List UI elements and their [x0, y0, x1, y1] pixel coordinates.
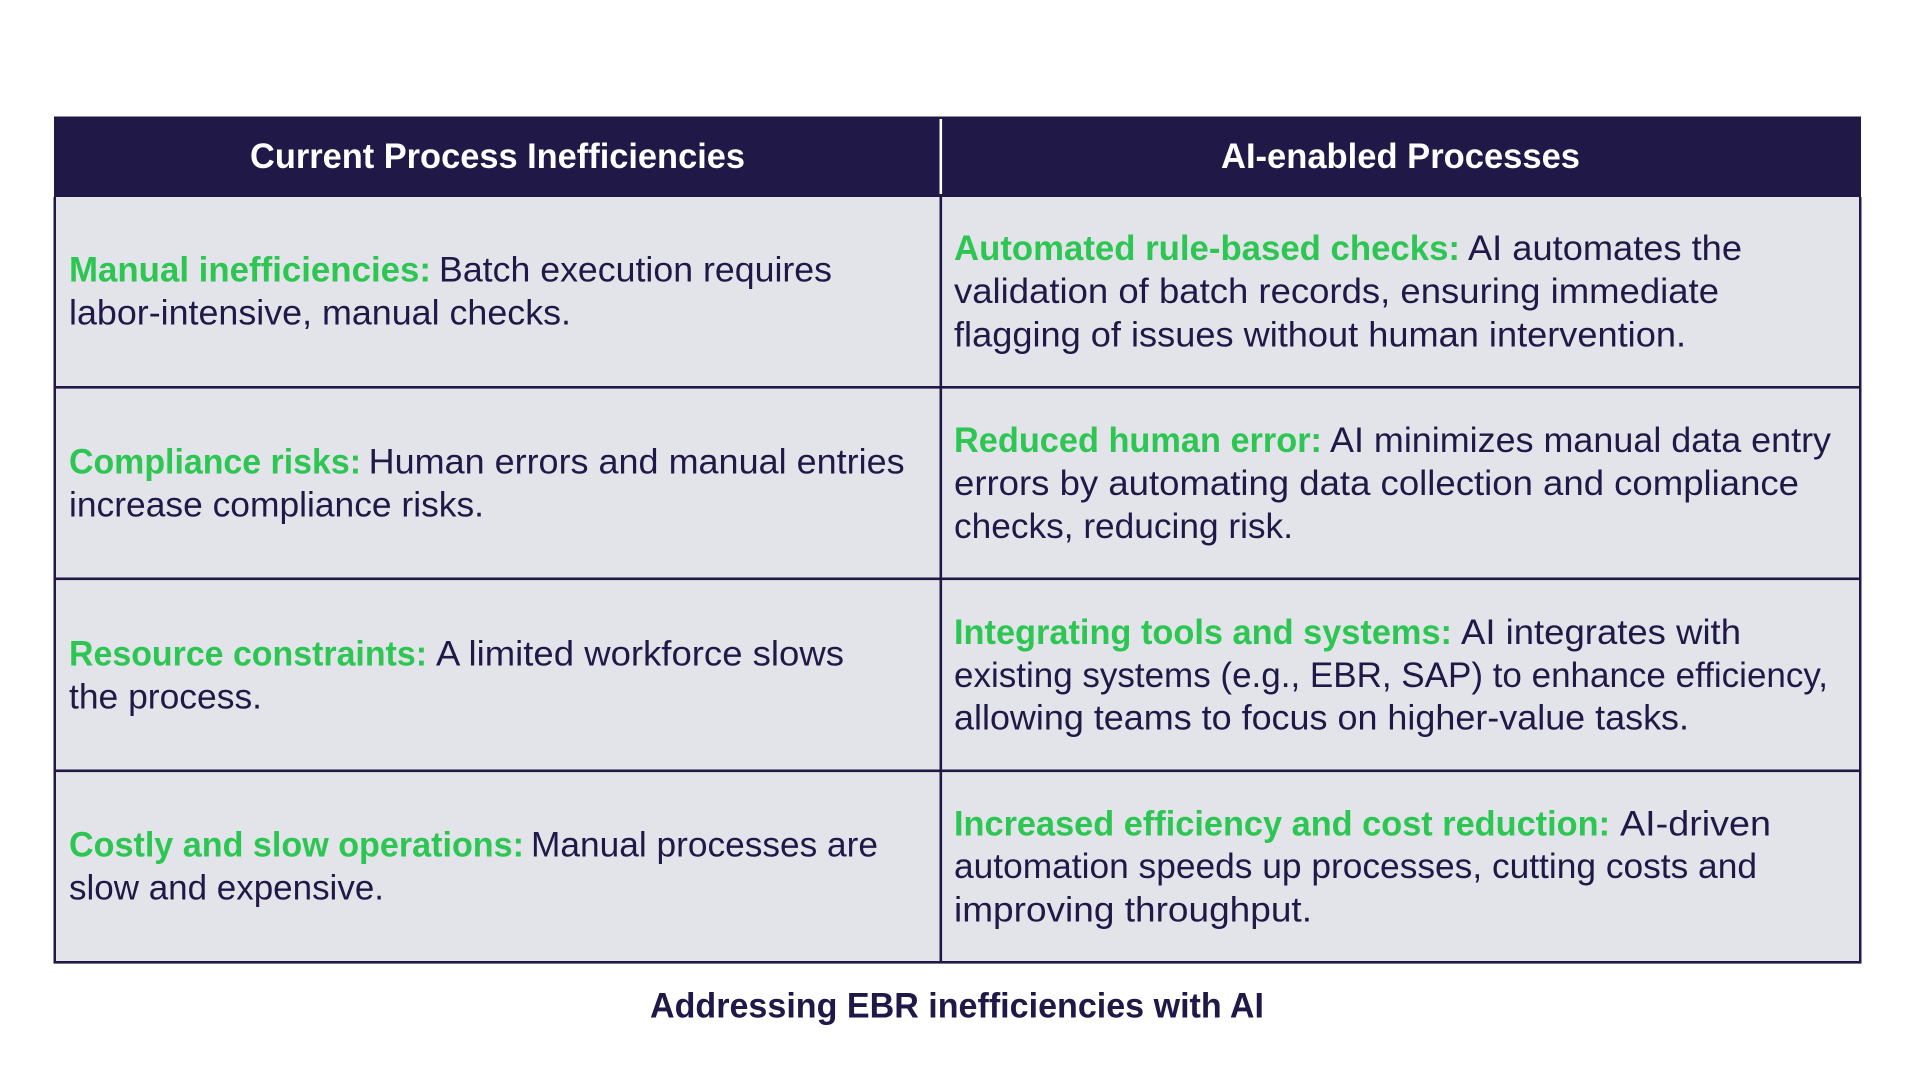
cell: increased efficiency and cost reduction	[954, 804, 1771, 930]
cell: resource constraints: Resource constraints:	[69, 634, 427, 674]
table body background	[55, 197, 1860, 962]
cell: costly and slow operations: Manual processes are	[531, 826, 878, 864]
cell: manual inefficiencies: labor-intensive, manual checks.	[69, 294, 571, 332]
cell: increased efficiency and cost reduction: AI-driven	[1620, 804, 1771, 844]
cell: manual inefficiencies	[69, 250, 832, 332]
cell: manual inefficiencies: Batch execution requires	[439, 250, 832, 290]
cell: reduced human error: Reduced human error:	[954, 421, 1322, 460]
cell: reduced human error: checks, reducing risk.	[954, 507, 1293, 546]
cell: automated rule-based checks	[954, 229, 1742, 354]
cell: automated rule-based checks: flagging of issues without human intervention.	[954, 316, 1686, 354]
cell: increased efficiency and cost reduction: improving throughput.	[954, 890, 1312, 930]
cell: automated rule-based checks: Automated rule-based checks:	[954, 229, 1460, 268]
table header band	[54, 116, 1861, 197]
cell: integrating tools and systems: allowing teams to focus on higher-value tasks.	[954, 698, 1689, 738]
caption: Addressing EBR inefficiencies with AI	[650, 986, 1264, 1026]
heading: current process inefficiencies: Current Process Inefficiencies	[250, 137, 745, 176]
cell: compliance risks: Compliance risks:	[69, 442, 361, 482]
cell: integrating tools and systems	[954, 613, 1828, 738]
cell: integrating tools and systems: Integrating tools and systems:	[954, 613, 1452, 652]
cell: resource constraints: A limited workforce slows	[436, 634, 844, 674]
cell: automated rule-based checks: validation of batch records, ensuring immediate	[954, 272, 1719, 311]
cell: compliance risks	[69, 442, 905, 524]
cell: integrating tools and systems: existing systems (e.g., EBR, SAP) to enhance efficiency,	[954, 656, 1828, 695]
cell: reduced human error: errors by automating data collection and compliance	[954, 464, 1799, 503]
cell: costly and slow operations: slow and expensive.	[69, 868, 384, 908]
heading: AI-enabled processes: AI-enabled Processes	[1221, 137, 1580, 176]
cell: integrating tools and systems: AI integrates with	[1461, 613, 1741, 652]
cell: automated rule-based checks: AI automates the	[1468, 229, 1742, 268]
cell: reduced human error: AI minimizes manual data entry	[1330, 421, 1832, 460]
cell: compliance risks: increase compliance risks.	[69, 486, 484, 524]
cell: resource constraints: the process.	[69, 678, 262, 716]
cell: costly and slow operations	[69, 826, 878, 908]
header column divider	[940, 119, 942, 194]
table	[54, 116, 1862, 964]
cell: increased efficiency and cost reduction: automation speeds up processes, cutting costs and	[954, 847, 1757, 886]
cell: resource constraints	[69, 634, 844, 716]
cell: reduced human error	[954, 421, 1832, 546]
cell: manual inefficiencies: Manual inefficiencies:	[69, 250, 431, 290]
cell: increased efficiency and cost reduction: Increased efficiency and cost reduction:	[954, 804, 1610, 844]
table grid lines	[54, 197, 1862, 964]
cell: compliance risks: Human errors and manual entries	[369, 442, 905, 482]
cell: costly and slow operations: Costly and slow operations:	[69, 826, 524, 864]
